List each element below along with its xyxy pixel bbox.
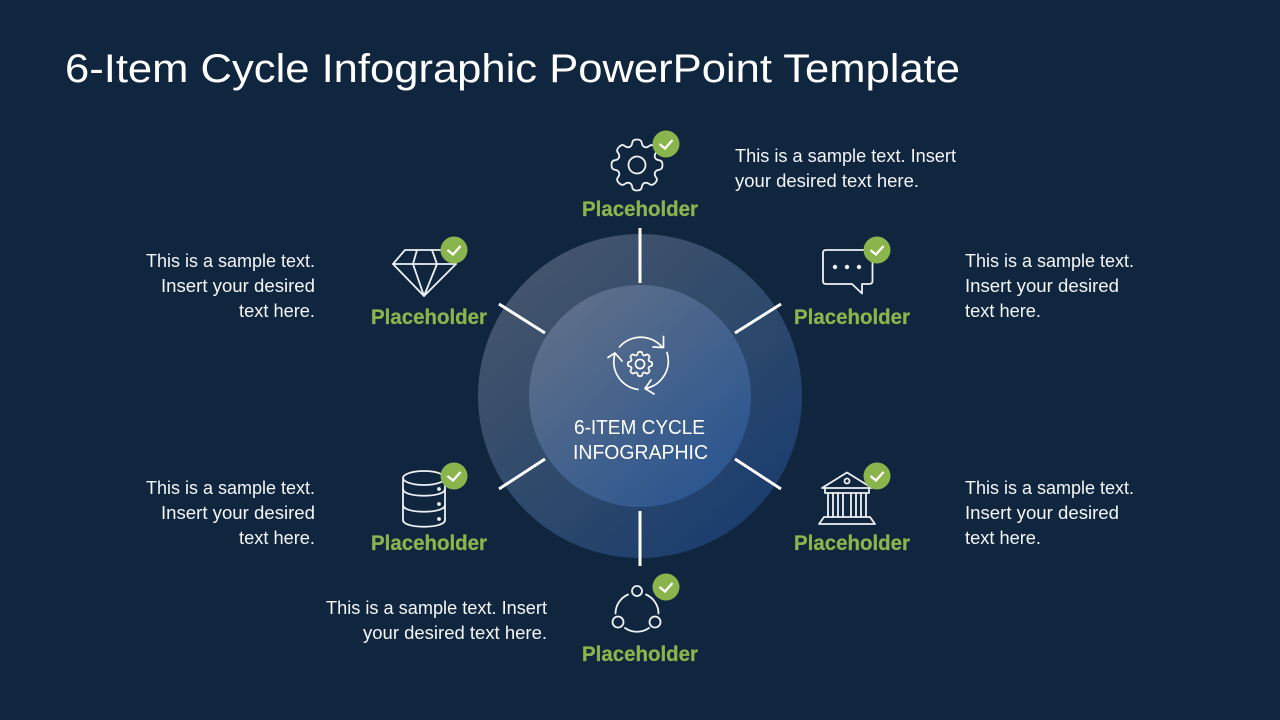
- description: your desired text here.: [735, 171, 919, 191]
- icon: three linked circles: [612, 586, 660, 632]
- item: bottom: [326, 574, 698, 666]
- description: text here.: [239, 528, 315, 548]
- label: Placeholder: [582, 643, 698, 666]
- icon: check badge: [440, 462, 468, 490]
- label: Placeholder: [582, 198, 698, 221]
- icon: speech bubble: [823, 250, 872, 294]
- title: 6-Item Cycle Infographic PowerPoint Template: [65, 47, 960, 91]
- description: This is a sample text. Insert: [735, 146, 956, 166]
- description: [146, 478, 315, 548]
- description: [965, 251, 1134, 321]
- description: This is a sample text.: [965, 251, 1134, 271]
- item: upper right: [794, 236, 1134, 329]
- item: lower left: [146, 462, 487, 555]
- item: lower right: [794, 462, 1134, 555]
- description: [326, 598, 547, 643]
- description: text here.: [965, 528, 1041, 548]
- center label: INFOGRAPHIC: [573, 442, 708, 464]
- label: Placeholder: [794, 532, 910, 555]
- label: Placeholder: [371, 532, 487, 555]
- inner circle: [529, 285, 751, 507]
- icon: gear: [612, 140, 662, 190]
- item: top: [582, 130, 956, 221]
- icon: cycle with gear: [608, 336, 668, 394]
- icon: check badge: [652, 574, 680, 600]
- description: Insert your desired: [161, 276, 315, 296]
- item: upper left: [146, 236, 487, 329]
- description: This is a sample text.: [965, 478, 1134, 498]
- center label: [573, 417, 708, 464]
- label: Placeholder: [794, 306, 910, 329]
- cycle diagram: [478, 228, 802, 566]
- icon: check badge: [440, 236, 468, 264]
- center label: 6-ITEM CYCLE: [574, 417, 705, 439]
- label: Placeholder: [371, 306, 487, 329]
- icon: check badge: [864, 236, 890, 264]
- description: Insert your desired: [161, 503, 315, 523]
- icon: check badge: [652, 130, 680, 158]
- description: Insert your desired: [965, 503, 1119, 523]
- icon: bank building: [819, 472, 875, 524]
- icon: diamond: [393, 250, 456, 296]
- description: This is a sample text.: [146, 478, 315, 498]
- description: [146, 251, 315, 321]
- description: text here.: [965, 301, 1041, 321]
- description: [965, 478, 1134, 548]
- spokes: [499, 228, 781, 566]
- description: This is a sample text.: [146, 251, 315, 271]
- outer circle: [478, 234, 802, 558]
- description: This is a sample text. Insert: [326, 598, 547, 618]
- icon: database: [403, 471, 445, 527]
- description: [735, 146, 956, 191]
- icon: check badge: [864, 462, 890, 490]
- description: text here.: [239, 301, 315, 321]
- description: your desired text here.: [363, 623, 547, 643]
- description: Insert your desired: [965, 276, 1119, 296]
